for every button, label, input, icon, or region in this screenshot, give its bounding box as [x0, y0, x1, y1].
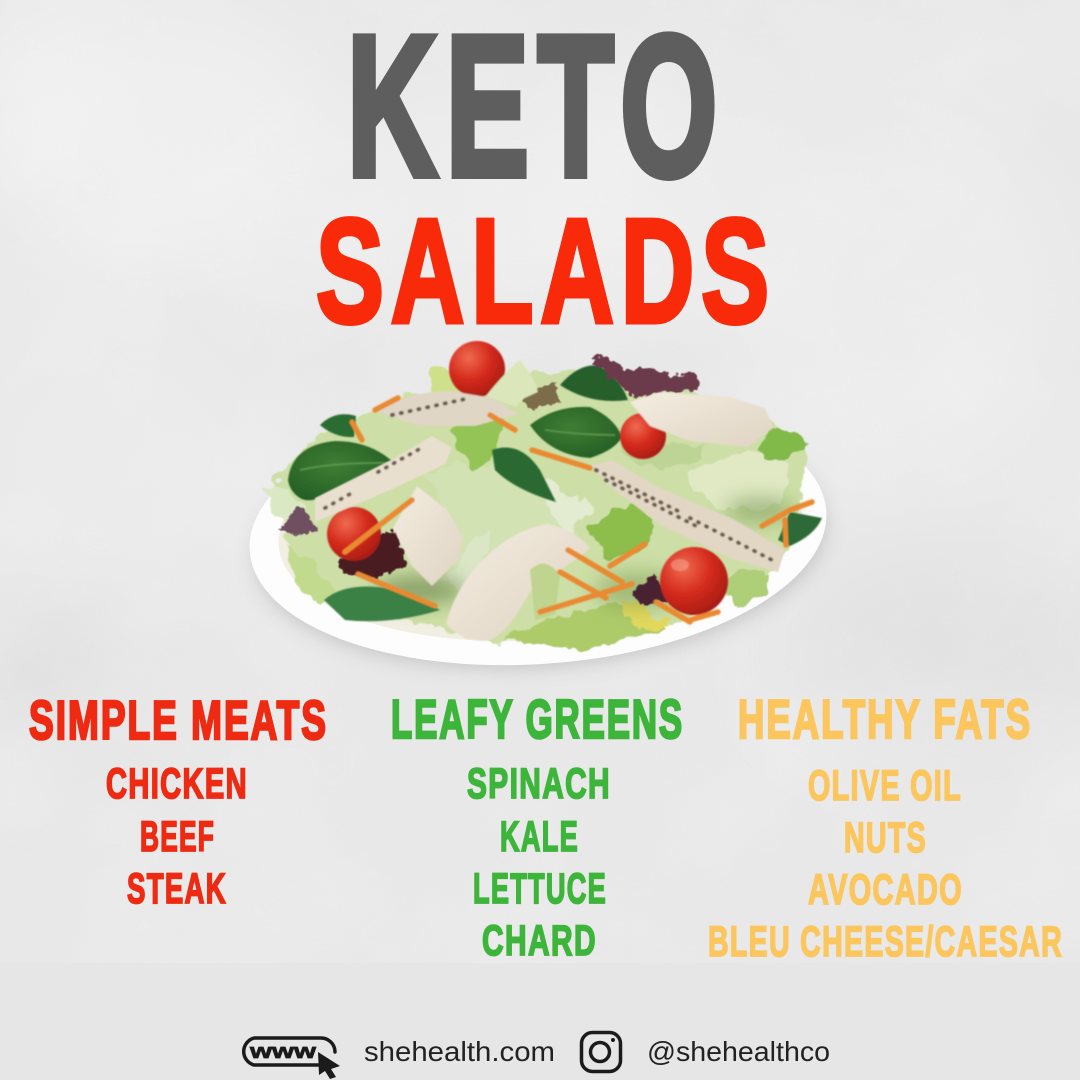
list: meats: CHICKEN [106, 760, 248, 808]
column: simple meats [29, 689, 328, 913]
list: greens: CHARD [482, 917, 597, 965]
text: instagram handle: @shehealthco [647, 1036, 830, 1067]
text: website: shehealth.com [364, 1036, 555, 1067]
list: fats [708, 762, 1063, 966]
chicken slices [378, 391, 518, 426]
list: fats: OLIVE OIL [808, 762, 962, 810]
small lettuce on big chicken slice [530, 564, 560, 620]
lettuce layer [262, 365, 810, 650]
title: SALADS: SALADS [316, 189, 776, 354]
column: leafy greens [391, 688, 684, 965]
plate [240, 378, 836, 686]
heading: leafy greens: LEAFY GREENS [391, 688, 684, 750]
icon: www cursor: www [249, 1041, 317, 1063]
heading: simple meats: SIMPLE MEATS [29, 689, 328, 751]
title: KETO: KETO [347, 0, 726, 218]
list: meats: BEEF [140, 813, 215, 861]
list: fats: NUTS [844, 814, 927, 862]
purple lettuce [280, 354, 698, 605]
icon: www cursor [244, 1038, 340, 1079]
list: greens: SPINACH [467, 760, 611, 808]
list: fats: AVOCADO [808, 866, 963, 914]
column: healthy fats [708, 688, 1063, 966]
list: meats: STEAK [127, 865, 227, 913]
spinach leaves [288, 365, 822, 621]
lettuce shadows [375, 498, 795, 608]
list: greens: KALE [500, 813, 579, 861]
carrot strips [345, 398, 812, 622]
salad plate illustration [240, 341, 836, 686]
icon: instagram [582, 1032, 620, 1072]
list: greens [467, 760, 611, 965]
grill marks [325, 398, 772, 560]
lettuce leaf over top tomato [486, 360, 538, 405]
footer: contact links [244, 1032, 830, 1079]
tomatoes and chicken [315, 341, 812, 641]
list: meats [106, 760, 248, 913]
list: greens: LETTUCE [473, 865, 607, 913]
